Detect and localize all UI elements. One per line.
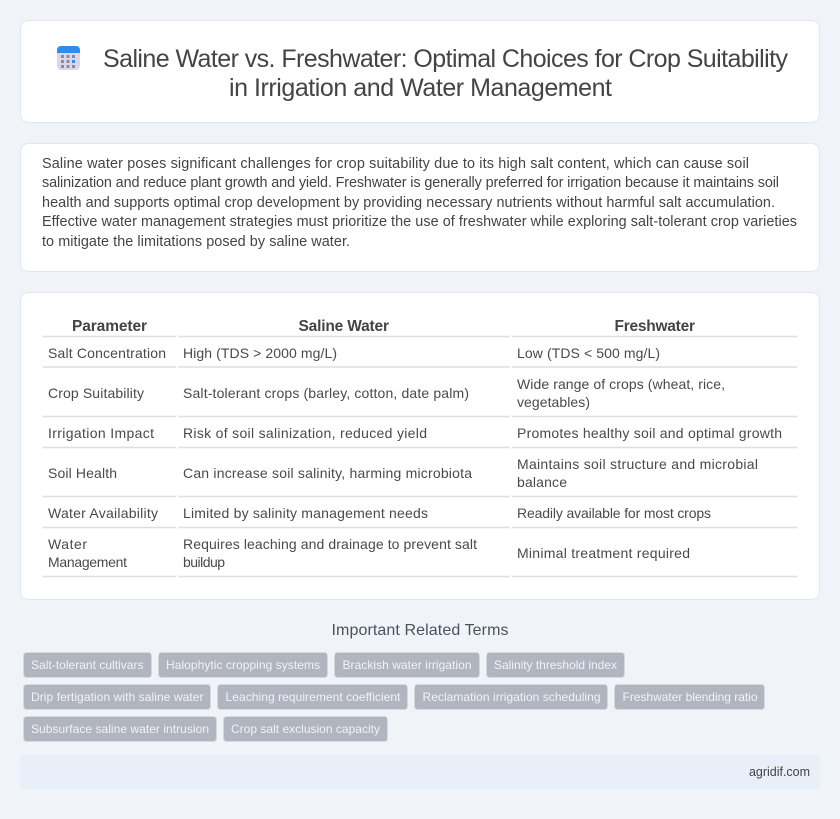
tag <box>414 684 608 710</box>
tag <box>614 684 764 710</box>
table header: Freshwater <box>614 318 695 335</box>
row: crop suitability: Salt-tolerant crops (barley, cotton, date palm) <box>183 385 469 401</box>
intro text block: Effective water management strategies must prioritize the use of freshwater while exploring salt-tolerant crop varieties <box>42 214 797 230</box>
row: salt concentration: Low (TDS < 500 mg/L) <box>517 345 660 361</box>
title: Saline Water vs. Freshwater: Optimal Choices for Crop Suitability <box>103 45 788 73</box>
row: crop suitability: Wide range of crops (wheat, rice, <box>517 376 725 392</box>
row: water availability: Water Availability <box>48 505 158 521</box>
row: crop suitability: Crop Suitability <box>48 385 144 401</box>
tag: Leaching requirement coefficient <box>226 690 401 704</box>
tag: Salinity threshold index <box>494 658 617 672</box>
tag: Reclamation irrigation scheduling <box>422 690 600 704</box>
row: water availability <box>48 505 711 521</box>
intro text block: salinization and reduce plant growth and yield. Freshwater is generally preferred for irrigation because it maintains soil <box>42 175 779 191</box>
footer bar: agridif.com <box>749 765 810 779</box>
intro text block <box>42 156 797 250</box>
tag: Freshwater blending ratio <box>622 690 758 704</box>
panel: introduction <box>20 144 820 272</box>
row: irrigation impact <box>48 425 782 441</box>
row: soil health: Can increase soil salinity, harming microbiota <box>183 465 472 481</box>
row: water management: Requires leaching and drainage to prevent salt <box>183 536 477 552</box>
row: soil health: Maintains soil structure and microbial <box>517 456 758 472</box>
row: water availability: Readily available for most crops <box>517 505 711 521</box>
tag <box>218 684 408 710</box>
row: salt concentration: Salt Concentration <box>48 345 166 361</box>
row: water management: Management <box>48 554 127 570</box>
tag: Halophytic cropping systems <box>166 658 320 672</box>
footer bar <box>20 755 820 789</box>
tag <box>224 716 388 742</box>
row: salt concentration <box>48 345 660 361</box>
row: water management: buildup <box>183 554 225 570</box>
icon: calendar <box>57 46 80 70</box>
intro text block: health and supports optimal crop development by providing necessary nutrients without harmful salt accumulation. <box>42 195 775 211</box>
row: crop suitability <box>48 376 725 410</box>
tags: related terms <box>24 652 764 742</box>
row: water management: Minimal treatment required <box>517 545 690 561</box>
row: soil health <box>48 456 758 490</box>
row: irrigation impact: Irrigation Impact <box>48 425 154 441</box>
title: in Irrigation and Water Management <box>229 74 612 102</box>
row: water management <box>48 536 690 570</box>
intro text block: to mitigate the limitations posed by saline water. <box>42 234 350 250</box>
table header: Saline Water <box>298 318 389 335</box>
row: crop suitability: vegetables) <box>517 394 590 410</box>
tag <box>158 652 328 678</box>
tag <box>24 652 152 678</box>
tag: Drip fertigation with saline water <box>31 690 204 704</box>
tag <box>24 716 216 742</box>
tag: Brackish water irrigation <box>342 658 472 672</box>
tag <box>24 684 210 710</box>
row: water management: Water <box>48 536 87 552</box>
intro text block: Saline water poses significant challenges for crop suitability due to its high salt content, which can cause soil <box>42 156 749 172</box>
header panel <box>20 20 820 122</box>
title <box>103 45 788 102</box>
row: soil health: Soil Health <box>48 465 117 481</box>
row: soil health: balance <box>517 474 567 490</box>
table header: Parameter <box>72 318 147 335</box>
tag <box>486 652 624 678</box>
tag: Crop salt exclusion capacity <box>231 722 380 736</box>
tag: Salt-tolerant cultivars <box>31 658 144 672</box>
row: water availability: Limited by salinity management needs <box>183 505 428 521</box>
row: salt concentration: High (TDS > 2000 mg/L) <box>183 345 337 361</box>
table header <box>72 318 695 335</box>
tag <box>334 652 480 678</box>
row: irrigation impact: Promotes healthy soil and optimal growth <box>517 425 782 441</box>
tag: Subsurface saline water intrusion <box>31 722 209 736</box>
panel: comparison table <box>20 292 820 600</box>
row: irrigation impact: Risk of soil salinization, reduced yield <box>183 425 427 441</box>
heading: important related terms: Important Related Terms <box>332 622 508 639</box>
